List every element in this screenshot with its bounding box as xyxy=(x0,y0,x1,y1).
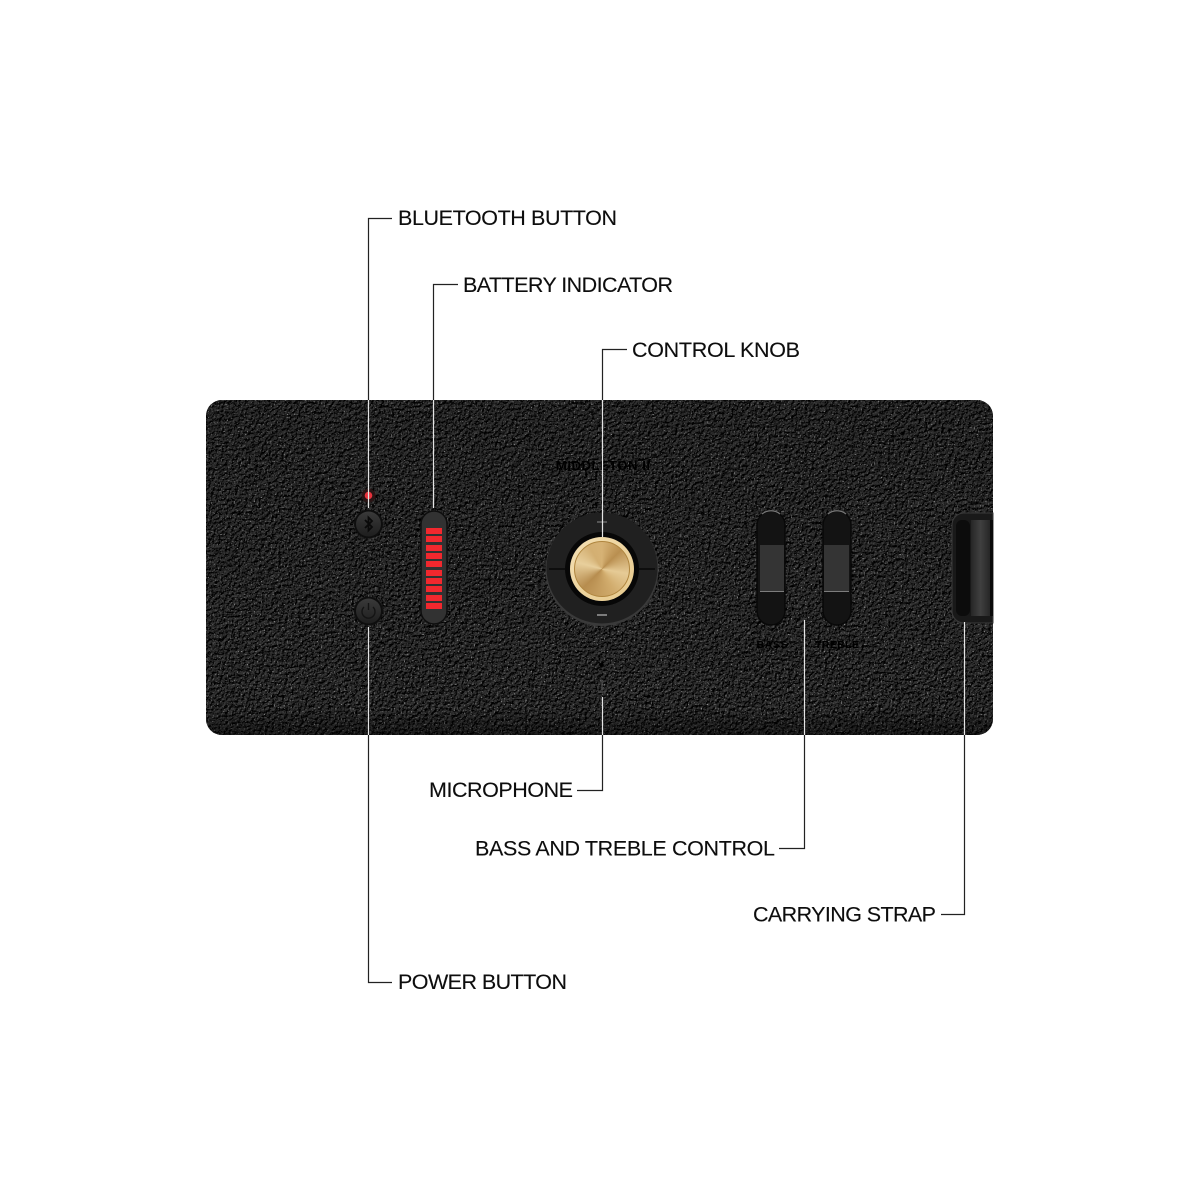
treble label: TREBLE xyxy=(815,639,859,651)
speaker body xyxy=(206,400,993,735)
callout: bluetooth button xyxy=(368,206,617,508)
callout: power button: POWER BUTTON xyxy=(398,970,567,994)
callout: battery indicator xyxy=(434,273,673,508)
callout: bluetooth button: BLUETOOTH BUTTON xyxy=(398,206,617,230)
callout: microphone: MICROPHONE xyxy=(429,778,573,802)
callout: control knob xyxy=(602,338,800,537)
callout: control knob: CONTROL KNOB xyxy=(632,338,800,362)
battery indicator xyxy=(421,511,447,624)
callout: carrying strap: CARRYING STRAP xyxy=(753,902,936,926)
callout: bass and treble control xyxy=(475,620,804,860)
callout: power button xyxy=(368,627,567,994)
icon: power button xyxy=(354,596,383,626)
status LED xyxy=(362,488,376,502)
callout: microphone xyxy=(429,697,602,802)
callout: bass and treble control: BASS AND TREBLE CONTROL xyxy=(475,836,775,860)
callout: carrying strap xyxy=(753,622,964,926)
bass label: BASS xyxy=(756,639,788,651)
callout: battery indicator: BATTERY INDICATOR xyxy=(463,273,673,297)
model name: MIDDLETON II xyxy=(556,458,650,473)
carrying strap xyxy=(952,513,993,623)
treble slider xyxy=(823,511,851,625)
bass slider xyxy=(757,511,785,625)
icon: bluetooth button xyxy=(354,510,383,538)
microphone xyxy=(598,663,606,692)
control knob xyxy=(546,512,658,626)
